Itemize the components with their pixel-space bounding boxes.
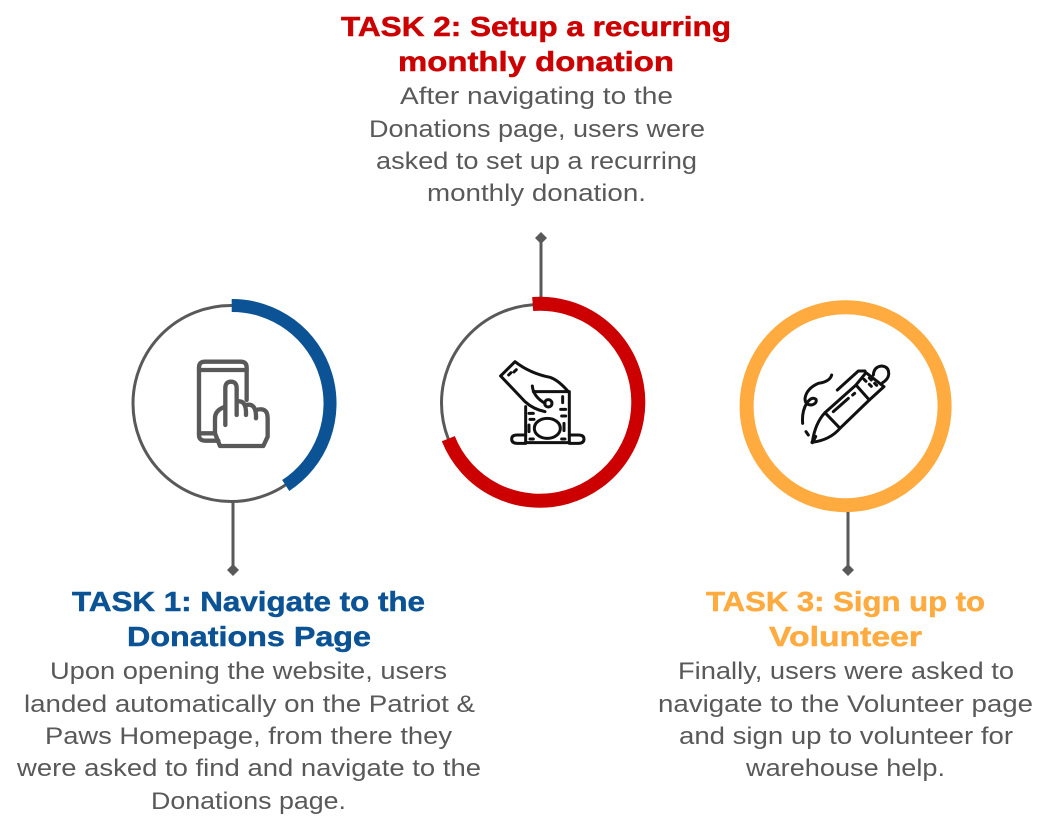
text block: task 1 description: Donations page. xyxy=(151,788,346,815)
text block: task 1 description: Paws Homepage, from there they xyxy=(45,723,452,750)
text block: task 1 description: were asked to find and navigate to the xyxy=(16,755,481,782)
text block: task 2 description: Donations page, users were xyxy=(369,116,705,143)
text block: task 3 description: warehouse help. xyxy=(745,755,945,782)
task 3 progress ring xyxy=(747,307,945,505)
text block: task 2 description: monthly donation. xyxy=(427,180,646,207)
task 1 progress ring xyxy=(133,305,330,502)
text block: task 2 description: After navigating to the xyxy=(400,83,673,110)
heading: task 3 xyxy=(706,586,985,652)
text block: task 1 description: Upon opening the website, users xyxy=(50,658,447,685)
heading: task 3: TASK 3: Sign up to xyxy=(706,586,985,617)
icon: hand dropping coin in box xyxy=(501,362,584,443)
text block: task 1 description xyxy=(16,658,481,815)
text block: task 3 description: navigate to the Volunteer page xyxy=(658,691,1033,718)
panel: task 3 xyxy=(658,307,1033,782)
heading: task 1: TASK 1: Navigate to the xyxy=(72,586,425,617)
connector: task 1 xyxy=(227,502,239,576)
text block: task 3 description: and sign up to volunteer for xyxy=(679,723,1013,750)
heading: task 1 xyxy=(72,586,425,652)
connector: task 2 xyxy=(535,232,547,300)
heading: task 1: Donations Page xyxy=(127,621,371,652)
text block: task 1 description: landed automatically on the Patriot & xyxy=(24,691,475,718)
heading: task 2: monthly donation xyxy=(398,46,674,77)
task 2 progress ring xyxy=(442,304,638,502)
panel: task 2 xyxy=(341,11,731,502)
icon: phone with tapping hand xyxy=(199,362,268,446)
text block: task 2 description: asked to set up a recurring xyxy=(376,148,697,175)
text block: task 3 description xyxy=(658,658,1033,782)
heading: task 2 xyxy=(341,11,731,77)
text block: task 2 description xyxy=(369,83,705,207)
icon: pen with scribble xyxy=(802,366,889,442)
panel: task 1 xyxy=(16,305,481,815)
heading: task 2: TASK 2: Setup a recurring xyxy=(341,11,731,42)
heading: task 3: Volunteer xyxy=(769,621,922,652)
connector: task 3 xyxy=(842,512,854,576)
text block: task 3 description: Finally, users were asked to xyxy=(678,658,1014,685)
